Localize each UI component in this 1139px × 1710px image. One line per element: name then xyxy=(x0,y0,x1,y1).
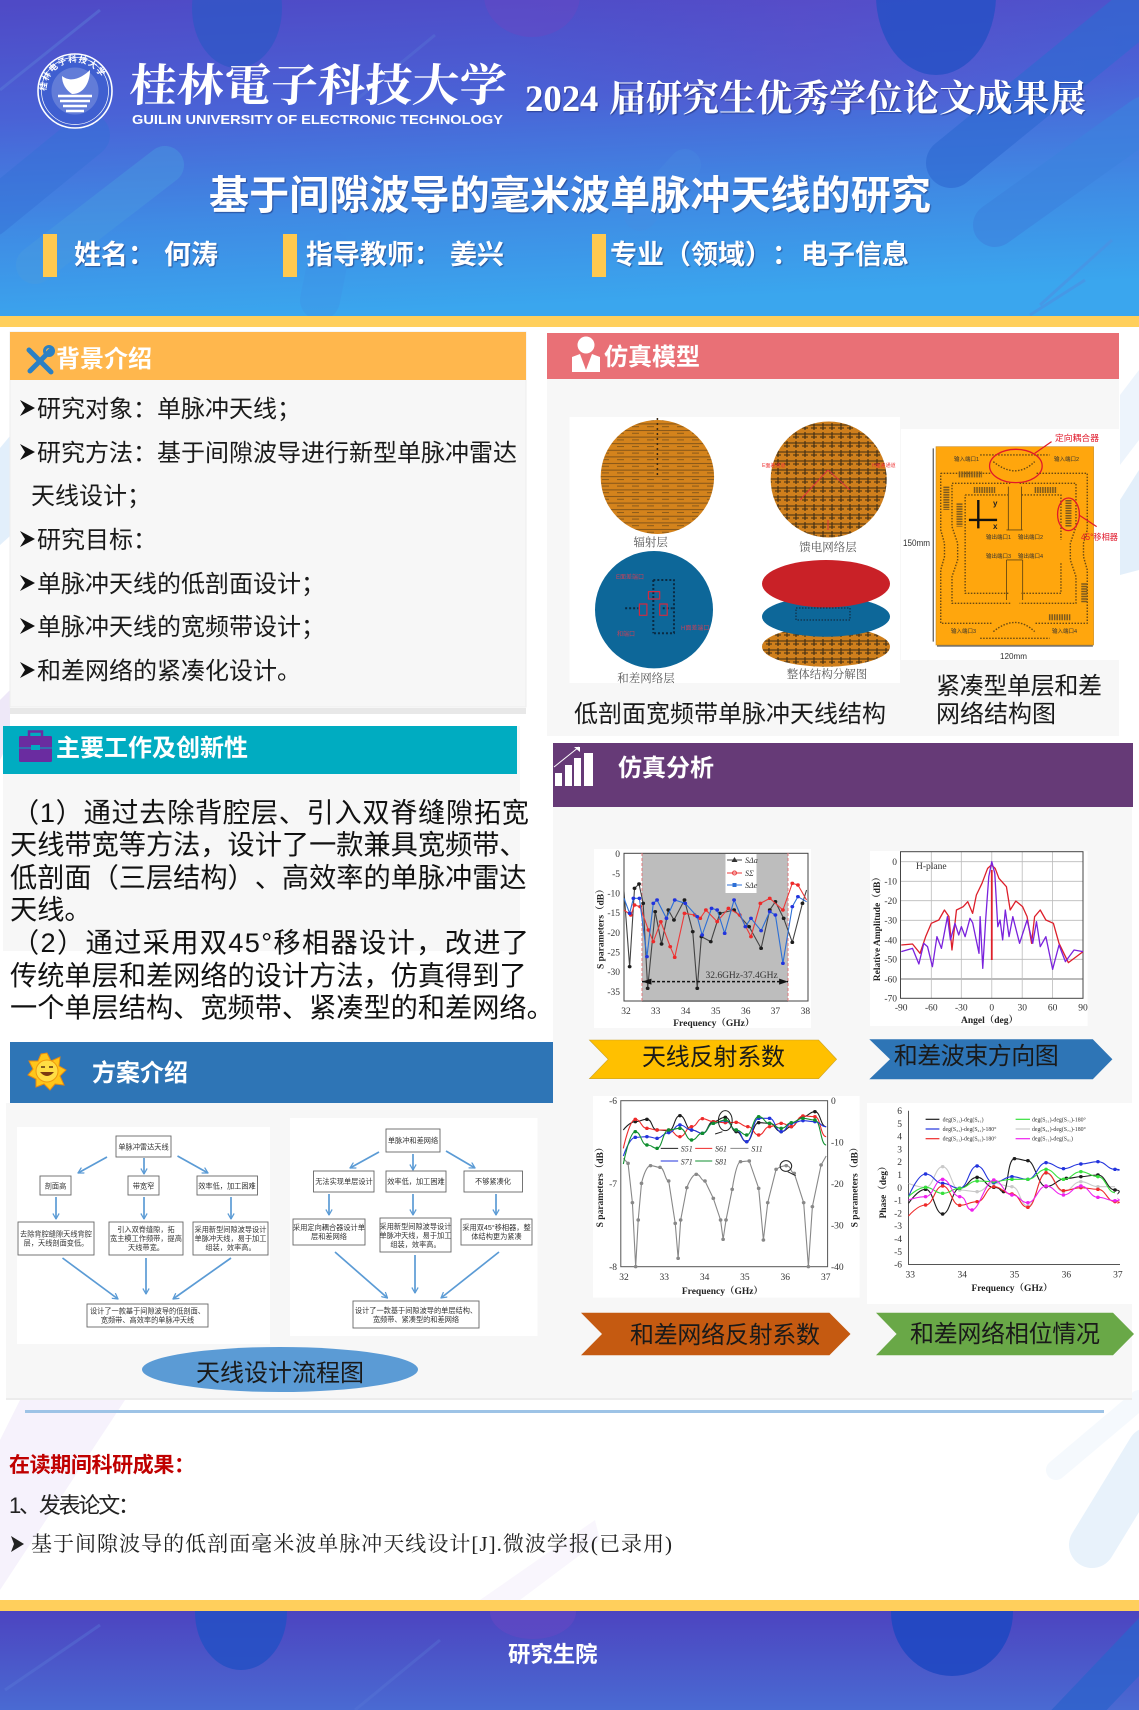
text: graduate school: 研究生院 xyxy=(508,1641,598,1667)
flowchart: antenna design: 宽频带、高效率的单脉冲天线 xyxy=(101,1316,194,1324)
flowchart: antenna design xyxy=(17,1127,270,1344)
text: main work paragraphs xyxy=(10,797,554,1023)
chart: network reflection coefficient: 36 xyxy=(780,1273,790,1283)
heading: achievements: 在读期间科研成果： xyxy=(9,1453,195,1477)
label: network phase: 和差网络相位情况 xyxy=(910,1321,1100,1348)
flowchart: sum-difference network design: 单脉冲天线，易于加工 xyxy=(380,1231,451,1240)
figure: compact single-layer network: 45°移相器 xyxy=(1081,531,1118,542)
feed network layer: E面差通道 xyxy=(762,462,785,469)
chart: network phase: -4 xyxy=(894,1235,902,1245)
chart: antenna reflection coefficient: SΔa xyxy=(745,856,758,865)
chart: network phase: -5 xyxy=(894,1248,902,1258)
chart: network phase: 35 xyxy=(1010,1270,1020,1280)
text: background list xyxy=(20,396,517,685)
chart: sum-difference beam pattern xyxy=(870,851,1088,1026)
panel: simulation analysis xyxy=(553,743,1134,1398)
label: antenna reflection coefficient xyxy=(589,1040,837,1079)
chart: network reflection coefficient: -6 xyxy=(609,1097,617,1107)
chart: network reflection coefficient: -30 xyxy=(831,1222,844,1232)
chart: network phase xyxy=(867,1103,1132,1304)
text: background list: 单脉冲天线的宽频带设计； xyxy=(37,614,325,641)
figure: compact single-layer network: 输入端口3 xyxy=(951,627,976,635)
text: paper citation: 基于间隙波导的低剖面毫米波单脉冲天线设计[J].微波学报(已录用) xyxy=(31,1532,672,1556)
chart: network reflection coefficient: 34 xyxy=(700,1273,710,1283)
icon: growth bars xyxy=(554,747,593,786)
text: background list: 和差网络的紧凑化设计。 xyxy=(37,658,301,685)
flowchart: sum-difference network design: 单脉冲和差网络 xyxy=(388,1136,438,1145)
text: main work paragraphs: 天线。 xyxy=(10,894,92,925)
chart: network reflection coefficient: S11 xyxy=(751,1144,763,1154)
flowchart: sum-difference network design: 体结构更为紧凑 xyxy=(471,1232,522,1241)
chart: sum-difference beam pattern: 30 xyxy=(1017,1004,1027,1014)
flowchart: antenna design: 单脉冲天线，易于加工 xyxy=(195,1234,266,1243)
flowchart: antenna design: 设计了一款基于间隙波导的低剖面、 xyxy=(90,1306,205,1316)
chart: network reflection coefficient: S71 xyxy=(681,1158,693,1166)
text: background list: 单脉冲天线的低剖面设计； xyxy=(37,571,325,598)
flowchart: sum-difference network design: 宽频带、紧凑型的和差网络 xyxy=(373,1315,459,1324)
chart: antenna reflection coefficient: -20 xyxy=(607,929,620,939)
chart: network phase: 2 xyxy=(897,1158,902,1168)
chart: network phase: 0 xyxy=(897,1184,902,1194)
flowchart: antenna design: 层，天线剖面变低。 xyxy=(24,1238,88,1248)
heading: main work: 主要工作及创新性 xyxy=(56,735,248,762)
figure: compact single-layer network: 输入端口2 xyxy=(1054,455,1079,463)
flowchart: sum-difference network design: 设计了一款基于间隙波导的单层结构、 xyxy=(355,1306,477,1315)
text: main work paragraphs: 一个单层结构、宽频带、紧凑型的和差网络。 xyxy=(10,992,554,1023)
sum difference network layer: H面差端口 xyxy=(681,624,709,632)
chart: sum-difference beam pattern: -60 xyxy=(884,975,897,985)
feed network layer xyxy=(762,422,896,554)
text: background list: 研究目标： xyxy=(37,527,157,554)
heading: simulation analysis: 仿真分析 xyxy=(618,755,714,782)
thesis title: 基于间隙波导的毫米波单脉冲天线的研究 xyxy=(209,174,931,218)
figure: compact single-layer network: x xyxy=(993,522,998,531)
flowchart: sum-difference network design: 采用定向耦合器设计单 xyxy=(293,1223,365,1232)
chart: network reflection coefficient: -20 xyxy=(831,1180,844,1190)
panel: simulation model xyxy=(547,333,1120,736)
chart: antenna reflection coefficient: 32 xyxy=(621,1007,631,1017)
icon: sun xyxy=(28,1053,66,1090)
chart: network phase: -1 xyxy=(894,1197,902,1207)
chart: sum-difference beam pattern: -10 xyxy=(884,878,897,888)
chart: antenna reflection coefficient: Frequency（GHz） xyxy=(673,1018,754,1029)
chart: network reflection coefficient: Frequency（GHz） xyxy=(682,1286,763,1297)
label: antenna reflection coefficient: 天线反射系数 xyxy=(642,1044,785,1071)
flowchart: antenna design: 引入双脊缝隙，拓 xyxy=(117,1225,175,1234)
chart: network reflection coefficient: S51 xyxy=(681,1144,693,1154)
chart: sum-difference beam pattern: 90 xyxy=(1078,1004,1088,1014)
sum difference network layer: 和端口 xyxy=(617,630,635,638)
flowchart: antenna design: 宽主模工作频带，提高 xyxy=(110,1234,182,1243)
chart: antenna reflection coefficient: 38 xyxy=(801,1007,810,1017)
chart: sum-difference beam pattern: -60 xyxy=(925,1004,938,1014)
caption: compact network: 网络结构图 xyxy=(936,701,1056,728)
caption: compact network xyxy=(936,673,1102,728)
chart: network phase: deg(S₁₁)-deg(S₄₁) xyxy=(943,1116,984,1123)
author info row: 指导教师： xyxy=(306,240,441,270)
chart: network phase: Frequency（GHz） xyxy=(971,1283,1053,1294)
label: network phase xyxy=(876,1313,1134,1355)
caption: antenna structure: 低剖面宽频带单脉冲天线结构 xyxy=(574,701,886,728)
feed network layer: 馈电网络层 xyxy=(799,540,857,554)
caption: compact network: 紧凑型单层和差 xyxy=(936,673,1102,700)
figure: compact single-layer network: 输入端口4 xyxy=(1052,627,1077,635)
chart: sum-difference beam pattern: Relative Amplitude（dB） xyxy=(872,872,883,981)
author info row: 电子信息 xyxy=(801,240,909,270)
chart: antenna reflection coefficient: -25 xyxy=(607,948,620,958)
exploded view: 整体结构分解图 xyxy=(787,667,867,681)
figure: compact single-layer network: y xyxy=(993,499,998,508)
chart: antenna reflection coefficient: 0 xyxy=(615,850,620,860)
chart: network phase: deg(S₅₁)-deg(S₇₁)-180° xyxy=(1032,1116,1087,1123)
label: beam pattern xyxy=(869,1039,1112,1079)
chart: sum-difference beam pattern: -70 xyxy=(884,995,897,1005)
figure: compact single-layer network: 输出端口3 xyxy=(986,552,1011,560)
chart: antenna reflection coefficient: 33 xyxy=(651,1007,661,1017)
chart: network phase: 4 xyxy=(897,1133,902,1143)
chart: network phase: 34 xyxy=(957,1270,967,1280)
sum difference network layer: 和差网络层 xyxy=(617,671,675,685)
author info row: 姓名： xyxy=(74,240,155,270)
chart: network phase: Phase（deg） xyxy=(878,1161,889,1219)
chart: network reflection coefficient: 32 xyxy=(619,1273,629,1283)
chart: sum-difference beam pattern: Angel（deg） xyxy=(961,1015,1018,1026)
chart: sum-difference beam pattern: 0 xyxy=(892,858,897,868)
text: main work paragraphs: 传统单层和差网络的设计方法，仿真得到了 xyxy=(10,960,527,991)
flowchart: antenna design: 效率低，加工困难 xyxy=(198,1182,256,1190)
panel: scheme introduction xyxy=(6,1042,1132,1400)
chart: network phase: 1 xyxy=(897,1171,902,1181)
chart: antenna reflection coefficient: 32.6GHz-37.4GHz xyxy=(705,971,778,981)
figure: antenna layers xyxy=(570,417,900,685)
chart: network reflection coefficient: 33 xyxy=(660,1273,669,1283)
text: publications label: 1、发表论文： xyxy=(9,1493,140,1518)
figure: compact single-layer network: 150mm xyxy=(903,538,930,548)
chart: antenna reflection coefficient: SΔe xyxy=(745,881,758,890)
text: background list: 天线设计； xyxy=(31,483,151,510)
chart: sum-difference beam pattern: 0 xyxy=(989,1004,994,1014)
exhibition title: 届研究生优秀学位论文成果展 xyxy=(609,78,1086,119)
footer banner xyxy=(0,1600,1139,1710)
flowchart: sum-difference network design xyxy=(290,1118,538,1336)
heading: scheme: 方案介绍 xyxy=(92,1059,188,1087)
label: network reflection coefficient: 和差网络反射系数 xyxy=(630,1322,820,1349)
chart: network reflection coefficient: 35 xyxy=(740,1273,750,1283)
flowchart: sum-difference network design: 不够紧凑化 xyxy=(475,1177,511,1186)
radiating layer: 辐射层 xyxy=(633,535,668,549)
figure: compact single-layer network: 输出端口1 xyxy=(986,533,1011,541)
chart: antenna reflection coefficient xyxy=(594,849,811,1029)
chart: sum-difference beam pattern: -30 xyxy=(884,917,897,927)
icon: university seal logo xyxy=(37,53,113,129)
header banner xyxy=(0,0,1139,316)
figure: compact single-layer network: 输出端口4 xyxy=(1018,552,1043,560)
chart: network reflection coefficient: -8 xyxy=(609,1263,617,1273)
exhibition title: 2024 xyxy=(525,78,598,119)
chart: network reflection coefficient: S parameters（dB） xyxy=(850,1143,860,1227)
text: main work paragraphs: （2）通过采用双45°移相器设计，改进了 xyxy=(12,927,529,958)
chart: network reflection coefficient xyxy=(593,1096,860,1298)
label: network reflection coefficient xyxy=(581,1313,850,1355)
panel: main work and innovation xyxy=(3,726,554,1023)
chart: antenna reflection coefficient: 36 xyxy=(741,1007,751,1017)
icon: crossed tools xyxy=(29,346,54,372)
chart: network reflection coefficient: -7 xyxy=(609,1180,617,1190)
figure: compact single-layer network: 输入端口1 xyxy=(954,455,979,463)
chart: sum-difference beam pattern: -30 xyxy=(955,1004,968,1014)
flowchart: sum-difference network design: 采用新型间隙波导设计 xyxy=(380,1222,451,1231)
chart: network reflection coefficient: S81 xyxy=(715,1158,727,1166)
label: beam pattern: 和差波束方向图 xyxy=(894,1043,1059,1070)
chart: antenna reflection coefficient: -15 xyxy=(607,909,620,919)
chart: network phase: -3 xyxy=(894,1222,902,1232)
chart: sum-difference beam pattern: -20 xyxy=(884,897,897,907)
chart: sum-difference beam pattern: 60 xyxy=(1048,1004,1058,1014)
text: main work paragraphs: 低剖面（三层结构）、高效率的单脉冲雷达 xyxy=(10,862,527,893)
chart: network phase: deg(S₆₁)-deg(S₇₁)-180° xyxy=(1032,1126,1087,1133)
chart: network reflection coefficient: 0 xyxy=(831,1097,836,1107)
flowchart: sum-difference network design: 效率低，加工困难 xyxy=(387,1177,445,1186)
text: background list: 研究方法：基于间隙波导进行新型单脉冲雷达 xyxy=(37,440,517,467)
author info row xyxy=(43,234,909,277)
chart: network phase: 5 xyxy=(897,1120,902,1130)
flowchart: sum-difference network design: 组装，效率高。 xyxy=(390,1240,441,1249)
chart: network phase: 3 xyxy=(897,1145,902,1155)
flowchart: antenna design: 去除背腔缝隙天线背腔 xyxy=(20,1230,92,1238)
chart: sum-difference beam pattern: -50 xyxy=(884,956,897,966)
sum difference network layer: E面差端口 xyxy=(616,573,644,581)
flowchart: antenna design: 天线带宽。 xyxy=(128,1243,164,1252)
flowchart: antenna design: 组装，效率高。 xyxy=(205,1243,256,1252)
chart: network phase: -2 xyxy=(894,1209,902,1219)
chart: sum-difference beam pattern: H-plane xyxy=(916,862,947,872)
chart: antenna reflection coefficient: 37 xyxy=(771,1007,780,1017)
heading: simulation model: 仿真模型 xyxy=(604,344,700,371)
chart: network phase: deg(S₅₁)-deg(S₆₁)-180° xyxy=(943,1136,997,1143)
feed network layer: H面差通道 xyxy=(872,462,896,469)
chart: network reflection coefficient: -40 xyxy=(831,1263,844,1273)
heading: background: 背景介绍 xyxy=(56,346,152,373)
figure: compact single-layer network: 输出端口2 xyxy=(1018,533,1043,541)
flowchart: sum-difference network design: 无法实现单层设计 xyxy=(315,1177,373,1186)
flowchart: sum-difference network design: 采用双45°移相器，整 xyxy=(462,1223,531,1232)
chart: antenna reflection coefficient: -35 xyxy=(607,988,620,998)
chart: sum-difference beam pattern: -40 xyxy=(884,936,897,946)
text: background list: 研究对象：单脉冲天线； xyxy=(37,396,301,423)
chart: antenna reflection coefficient: -30 xyxy=(607,968,620,978)
flowchart: antenna design: 剖面高 xyxy=(45,1182,66,1190)
figure: compact single-layer network xyxy=(901,429,1120,661)
flowchart: antenna design: 带宽窄 xyxy=(133,1182,154,1190)
icon: university seal logo: 桂林电子科技大学 xyxy=(38,54,106,91)
icon: person xyxy=(572,336,600,372)
flowchart: antenna design: 采用新型间隙波导设计 xyxy=(195,1225,266,1234)
sum difference network layer xyxy=(595,551,713,685)
flowchart: antenna design: 单脉冲雷达天线 xyxy=(118,1142,169,1152)
chart: network phase: -6 xyxy=(894,1261,902,1271)
panel: background introduction xyxy=(10,332,526,714)
section: research achievements xyxy=(9,1453,672,1556)
chart: network phase: deg(S₃₁)-deg(S₄₁)-180° xyxy=(943,1126,997,1133)
chart: network phase: 33 xyxy=(906,1270,915,1280)
figure: compact single-layer network: 120mm xyxy=(1000,651,1027,661)
figure: compact single-layer network: 定向耦合器 xyxy=(1055,432,1099,443)
university name: GUILIN UNIVERSITY OF ELECTRONIC TECHNOLOGY xyxy=(132,112,503,127)
chart: network reflection coefficient: S61 xyxy=(715,1144,727,1154)
chart: network reflection coefficient: -10 xyxy=(831,1139,844,1149)
text: main work paragraphs: 天线带宽等方法，设计了一款兼具宽频带、 xyxy=(10,829,527,860)
chart: network reflection coefficient: S parameters（dB） xyxy=(595,1143,606,1227)
icon: briefcase xyxy=(19,732,52,762)
chart: antenna reflection coefficient: SΣ xyxy=(745,869,754,878)
university name: 桂林電子科技大学 xyxy=(128,61,508,111)
chart: antenna reflection coefficient: -10 xyxy=(607,890,620,900)
chart: network phase: 37 xyxy=(1113,1270,1123,1280)
chart: sum-difference beam pattern: -90 xyxy=(895,1004,908,1014)
author info row: 姜兴 xyxy=(450,240,504,270)
chart: antenna reflection coefficient: -5 xyxy=(612,870,620,880)
chart: network reflection coefficient: 37 xyxy=(821,1273,831,1283)
flowchart: sum-difference network design: 层和差网络 xyxy=(311,1232,347,1241)
exploded view xyxy=(762,560,890,681)
caption: flowchart ellipse xyxy=(142,1347,418,1392)
radiating layer xyxy=(601,418,714,549)
caption: flowchart ellipse: 天线设计流程图 xyxy=(196,1360,364,1387)
text: main work paragraphs: （1）通过去除背腔层、引入双脊缝隙拓宽 xyxy=(12,797,529,828)
author info row: 何涛 xyxy=(164,240,218,270)
chart: antenna reflection coefficient: S parameters（dB） xyxy=(596,884,606,969)
chart: antenna reflection coefficient: 35 xyxy=(711,1007,721,1017)
chart: network phase: deg(S₇₁)-deg(S₈₁) xyxy=(1032,1136,1073,1143)
author info row: 专业（领域）： xyxy=(610,240,799,270)
chart: network phase: 6 xyxy=(897,1107,902,1117)
chart: antenna reflection coefficient: 34 xyxy=(681,1007,691,1017)
chart: network phase: 36 xyxy=(1062,1270,1071,1280)
